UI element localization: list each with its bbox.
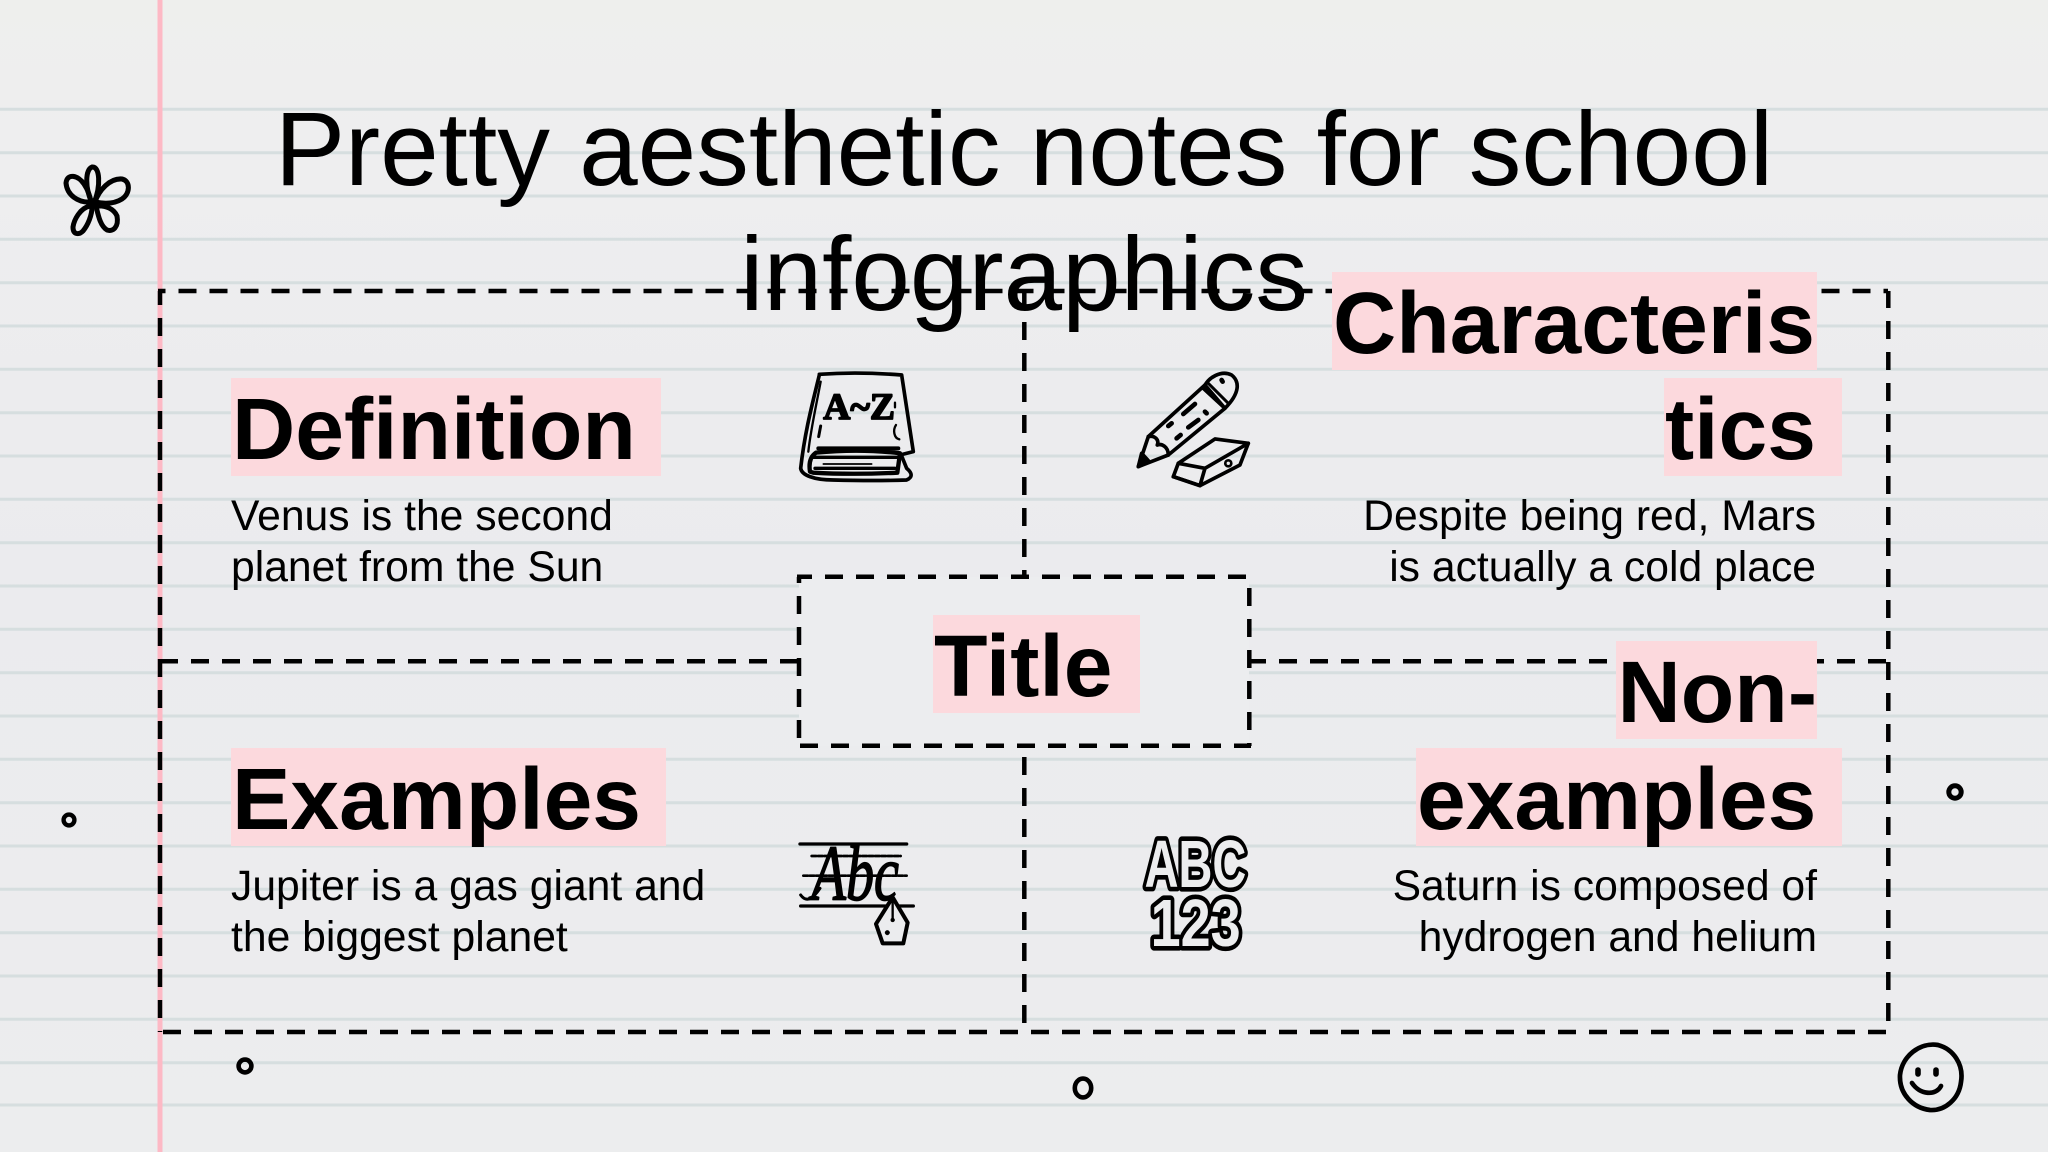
text: non-examples: Saturn is composed of: [1393, 862, 1817, 910]
text: examples: Jupiter is a gas giant and: [231, 862, 705, 910]
text: characteristics: Despite being red, Mars: [1363, 492, 1816, 540]
icon: pencil and eraser: [1136, 371, 1250, 488]
icon: A-Z book: [798, 371, 916, 482]
small circle bottom center: [1072, 1076, 1094, 1100]
heading: examples: examples: [1417, 750, 1816, 848]
text: examples: [231, 862, 705, 961]
text: definition: planet from the Sun: [231, 543, 603, 591]
text: non-examples: hydrogen and helium: [1419, 913, 1817, 961]
icon: smiley: [1898, 1042, 1964, 1112]
text: characteristics: [1363, 492, 1816, 591]
heading: characteris: Characteris: [1333, 274, 1815, 372]
heading: tics: tics: [1665, 380, 1816, 478]
icon: Abc calligraphy: [798, 829, 915, 946]
text: definition: [231, 492, 613, 591]
icon: flower: [64, 164, 131, 236]
small circle left: [61, 812, 77, 828]
panel: definition: [231, 378, 661, 591]
text: non-examples: [1393, 862, 1818, 961]
text: examples: the biggest planet: [231, 913, 568, 961]
small circle bottom left: [236, 1057, 254, 1075]
panel: non-examples: [1393, 641, 1842, 961]
icon: ABC 123: 123: [1151, 887, 1241, 961]
panel: characteristics: [1332, 272, 1842, 591]
small circle right: [1946, 783, 1964, 801]
heading: non-: Non-: [1618, 643, 1817, 741]
icon: ABC 123: [1142, 828, 1248, 961]
text: definition: Venus is the second: [231, 492, 613, 540]
heading: examples: Examples: [232, 750, 641, 848]
icon: Abc calligraphy: Abc: [808, 829, 899, 916]
heading: definition: Definition: [232, 380, 636, 478]
panel: examples: [231, 748, 705, 961]
title: Pretty aesthetic notes for school infographics: [275, 91, 1773, 333]
text: characteristics: is actually a cold place: [1389, 543, 1816, 591]
center title: Title: [934, 617, 1112, 715]
icon: A-Z book: A~Z: [823, 387, 895, 428]
icon: ABC 123: ABC: [1145, 828, 1246, 902]
